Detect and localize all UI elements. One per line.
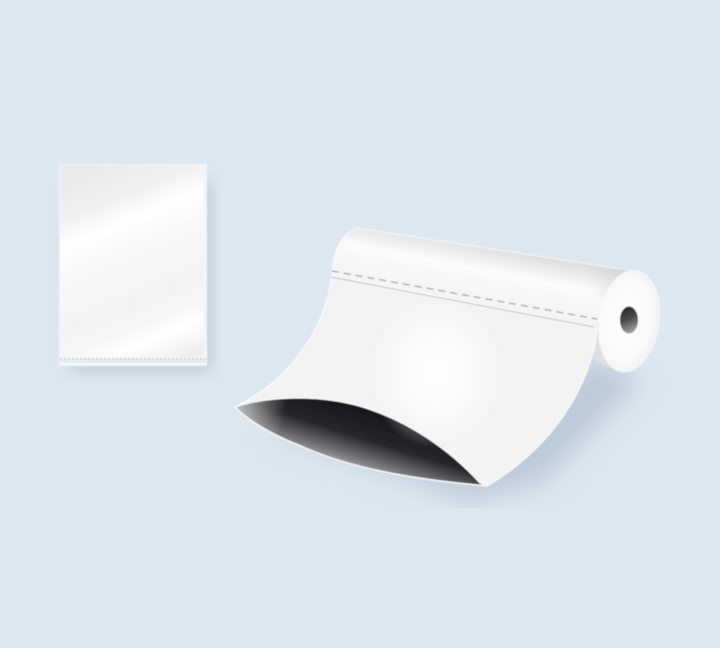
roll seam	[331, 277, 594, 327]
lower lip highlight	[235, 407, 487, 486]
inner dark opening	[235, 398, 482, 485]
roll core hole	[620, 306, 638, 334]
roll cylinder	[332, 228, 628, 370]
lower roll side	[590, 325, 640, 371]
flat sheet	[59, 164, 212, 372]
roll end shading	[470, 251, 628, 300]
sheet shadow	[70, 180, 212, 372]
sheet perforation	[60, 359, 206, 362]
sheet body	[59, 164, 207, 366]
roll perforation	[332, 271, 597, 319]
plastic roll	[235, 228, 666, 502]
curling sheet	[235, 275, 597, 486]
roll end cap	[592, 266, 666, 376]
sheet sheen	[368, 296, 504, 448]
roll shadow	[265, 360, 640, 502]
opening left tip	[235, 398, 285, 438]
sheet glossy panel	[60, 165, 204, 357]
